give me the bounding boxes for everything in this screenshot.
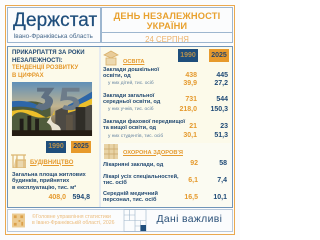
value: 51,3 (214, 132, 228, 139)
logo wordmark: Держстат (13, 10, 97, 31)
year badge 1990 (46, 141, 66, 153)
value: 27,2 (214, 80, 228, 87)
label: secondary: середньої освіти, од (103, 99, 160, 105)
label: higher: та вищої освіти, од (103, 125, 156, 131)
label: doctors: тис. осіб (103, 180, 127, 186)
value: 7,4 (217, 177, 227, 184)
value: 544 (216, 96, 228, 103)
title: ДЕНЬ НЕЗАЛЕЖНОСТІ (114, 10, 220, 20)
health section band (101, 143, 232, 207)
icon: QR code (12, 214, 25, 228)
grid logo (124, 209, 146, 232)
construction label (12, 172, 86, 191)
label: nurses: персонал, тис. осіб (103, 197, 156, 203)
sublabel: у них учнів, тис. осіб (108, 107, 153, 112)
outer border (5, 5, 235, 235)
left heading: НЕЗАЛЕЖНОСТІ: (12, 58, 63, 64)
copyright note: ©Головне управління статистики (32, 214, 111, 220)
label: preschool: освіти, од (103, 73, 131, 79)
label: preschool: Заклади дошкільної (103, 66, 159, 72)
header logo panel (7, 7, 101, 43)
construction value 1990: 408,0 (48, 194, 66, 201)
label: doctors (103, 174, 179, 186)
value: 10,1 (213, 194, 227, 201)
left heading (12, 50, 85, 78)
label: nurses (103, 191, 158, 203)
construction heading: БУДІВНИЦТВО (30, 160, 73, 166)
construction value 2025: 594,8 (72, 194, 90, 201)
left heading: ТЕНДЕНЦІЇ РОЗВИТКУ (12, 65, 78, 71)
label: hospitals: Лікарняні заклади, од (103, 162, 163, 168)
value: 23 (220, 123, 228, 130)
label: secondary (103, 92, 160, 105)
label: doctors: Лікарі усіх спеціальностей, (103, 174, 179, 180)
icon: hospital (104, 144, 118, 159)
icon: building (11, 154, 26, 168)
year badge 2025 right (209, 49, 229, 62)
year badge 2025 (71, 141, 91, 153)
left heading: В ЦИФРАХ (12, 72, 44, 78)
construction label: будинків, прийнятих (12, 178, 69, 184)
education heading: ОСВІТА (123, 58, 144, 64)
main panel (7, 46, 233, 208)
icon: graduation cap (103, 50, 119, 66)
copyright note: в Івано-Франківській області, 2026 (32, 220, 115, 226)
column divider (99, 47, 101, 207)
year badge 1990 right (178, 49, 198, 62)
year badge 2025 right: 2025 (211, 52, 227, 59)
tagline: Дані важливі (156, 214, 222, 225)
value: 438 (185, 72, 197, 79)
value: 30,1 (183, 132, 197, 139)
construction label: в експлуатацію, тис. м² (12, 185, 76, 191)
year badge 1990 right: 1990 (180, 52, 196, 59)
value: 218,0 (179, 106, 197, 113)
value: 445 (216, 72, 228, 79)
label: secondary: Заклади загальної (103, 92, 154, 98)
value: 58 (219, 160, 227, 167)
year badge 2025: 2025 (73, 143, 89, 150)
value: 39,9 (183, 80, 197, 87)
illustration: 35 years (12, 82, 92, 136)
title: УКРАЇНИ (147, 21, 187, 31)
year badge 1990: 1990 (48, 143, 64, 150)
footer panel (7, 209, 233, 232)
value: 16,5 (184, 194, 198, 201)
label: higher: Заклади фахової передвищої (103, 118, 185, 124)
health heading: ОХОРОНА ЗДОРОВ'Я (123, 150, 183, 156)
left heading: ПРИКАРПАТТЯ ЗА РОКИ (12, 50, 85, 56)
value: 6,1 (188, 177, 198, 184)
construction label: Загальна площа житлових (12, 172, 86, 178)
value: 150,3 (210, 106, 228, 113)
sublabel: у них студентів, тис. осіб (108, 134, 163, 139)
sublabel: у них дітей, тис. осіб (108, 81, 154, 86)
value: 21 (189, 123, 197, 130)
value: 92 (190, 160, 198, 167)
copyright note (32, 214, 115, 226)
date (102, 32, 232, 43)
label: higher (103, 118, 186, 131)
label: preschool (103, 66, 160, 79)
label: nurses: Середній медичний (103, 191, 158, 197)
region name: Івано-Франківська область (14, 32, 93, 40)
date: 24 СЕРПНЯ (145, 35, 189, 44)
header title panel (101, 7, 233, 43)
value: 731 (185, 96, 197, 103)
title (114, 10, 220, 31)
